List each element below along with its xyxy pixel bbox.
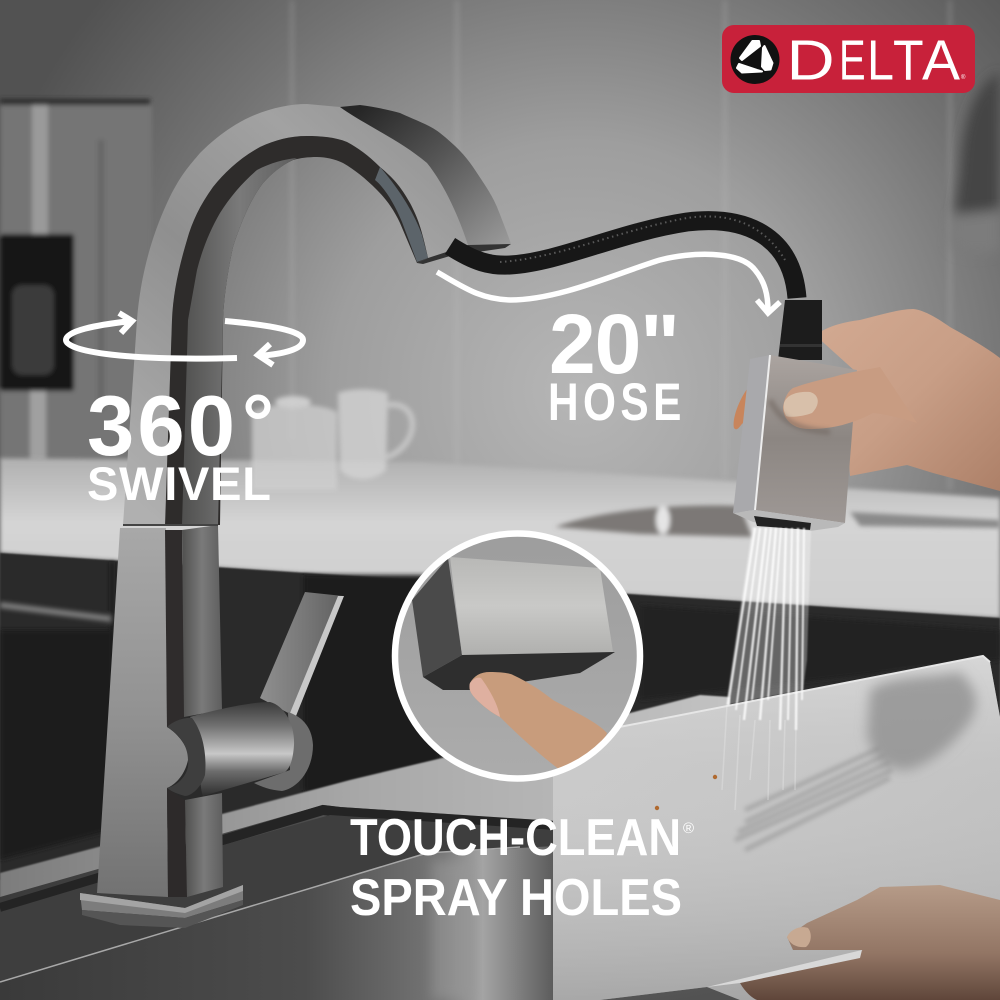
hand holding cutting board xyxy=(707,885,1000,1000)
hose length arrow xyxy=(437,254,780,313)
water spray xyxy=(722,527,811,810)
sink rim xyxy=(0,810,555,908)
hub collar xyxy=(167,718,205,796)
inset spray head front xyxy=(450,557,613,655)
inset circle: touch-clean spray holes xyxy=(390,530,645,785)
logo emblem xyxy=(730,35,780,84)
logo background xyxy=(722,25,975,93)
logo wordmark: A xyxy=(922,28,960,92)
board shadow of spray head xyxy=(867,672,976,770)
sink bright reflection xyxy=(432,860,470,1000)
text: touch-clean spray holes: TOUCH-CLEAN xyxy=(350,809,681,867)
text: 20 inch hose: HOSE xyxy=(548,374,686,432)
text: 360 degree swivel xyxy=(87,378,274,510)
Delta logo xyxy=(722,25,975,93)
head side face xyxy=(733,355,770,513)
logo wordmark: T xyxy=(893,29,924,92)
inset finger xyxy=(469,672,607,770)
inset ring xyxy=(395,534,640,778)
registered mark: ® xyxy=(961,74,966,81)
hand holding spray head xyxy=(734,309,1000,491)
text: 360 degree swivel: ° xyxy=(242,378,274,467)
thumb on spray head xyxy=(770,367,917,432)
board edge xyxy=(707,950,862,987)
spray head xyxy=(733,300,857,531)
logo wordmark: E xyxy=(839,29,866,92)
braided black hose xyxy=(450,216,797,298)
lower cabinets xyxy=(0,553,1000,880)
faucet base plate xyxy=(80,885,243,928)
background faucet blur xyxy=(950,72,1000,254)
sink edge highlight xyxy=(0,847,520,982)
faucet neck top seam xyxy=(123,524,218,526)
inset fingernail xyxy=(469,678,500,717)
hub cylinder xyxy=(190,702,294,796)
faucet body xyxy=(97,525,223,897)
swivel arrows xyxy=(66,313,303,365)
board top edge highlight xyxy=(553,656,990,740)
logo wordmark: D xyxy=(786,29,835,92)
text: touch-clean spray holes xyxy=(350,809,694,927)
cups and jug xyxy=(252,389,412,490)
lever xyxy=(260,592,343,715)
inset spray head side xyxy=(412,558,462,677)
text: touch-clean spray holes: SPRAY HOLES xyxy=(350,869,682,927)
logo wordmark: L xyxy=(867,29,894,92)
text: 20 inch hose: 20" xyxy=(549,297,680,391)
inset spray face xyxy=(423,652,615,690)
head front face xyxy=(755,355,857,523)
text: 360 degree swivel: 360 xyxy=(87,379,235,474)
board shadow stripes xyxy=(735,748,892,850)
sink xyxy=(0,805,555,1000)
logo wordmark xyxy=(786,28,960,92)
head edge highlight xyxy=(754,355,771,510)
fingertips behind head xyxy=(734,385,752,470)
hose connector xyxy=(778,300,822,360)
counter top xyxy=(0,458,1000,618)
text: 20 inch hose xyxy=(548,297,686,432)
food crumbs xyxy=(655,775,717,810)
spray nozzle xyxy=(754,516,811,530)
faucet neck xyxy=(123,104,511,525)
coffee maker xyxy=(0,99,152,461)
lower counter xyxy=(0,695,730,1000)
sink back wall xyxy=(0,815,555,982)
hub cap xyxy=(254,712,313,791)
palm and fingers xyxy=(815,309,1000,491)
cutting board xyxy=(553,656,1000,1000)
fingernail xyxy=(787,927,811,947)
cabinet detail xyxy=(0,562,1000,860)
faucet handle xyxy=(167,592,344,796)
text: touch-clean spray holes: ® xyxy=(683,820,694,837)
faucet xyxy=(80,104,511,928)
palm xyxy=(740,885,1000,1000)
head bottom xyxy=(733,510,845,531)
connector ring xyxy=(780,344,822,347)
background sink basin xyxy=(555,505,1000,537)
text: 360 degree swivel: SWIVEL xyxy=(87,457,271,510)
